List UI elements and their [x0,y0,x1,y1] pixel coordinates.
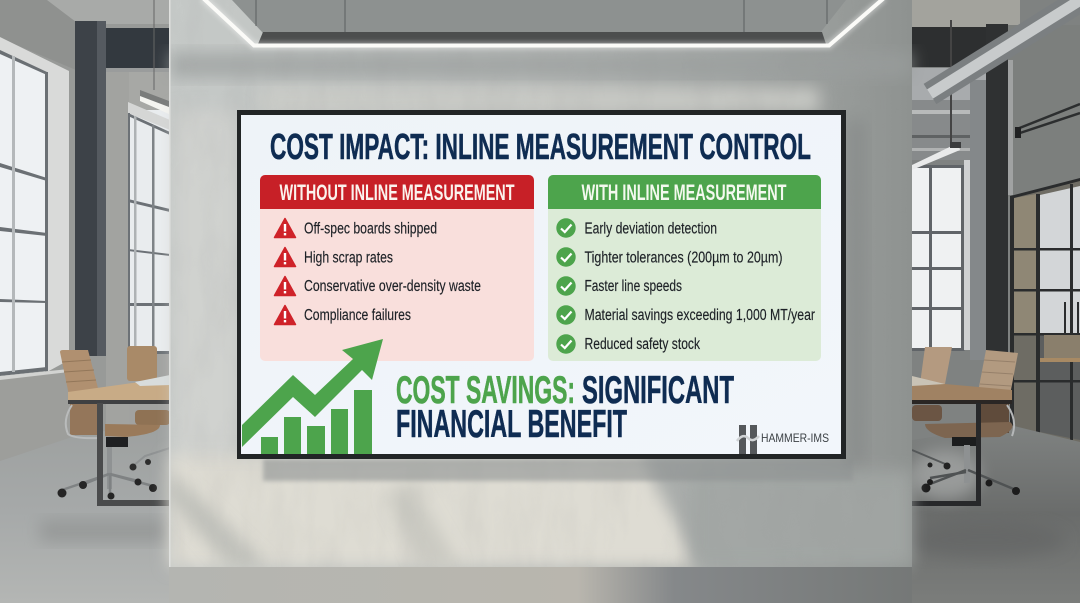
cost savings statement [396,369,734,446]
logo: Hammer-IMS: HAMMER-IMS [761,431,829,445]
item: over-density waste [274,276,481,296]
item: faster line speeds [556,276,682,296]
warning list [274,218,481,324]
item: early deviation detection: Early deviation detection [584,220,717,238]
infographic screen [237,110,846,459]
right chairs and table [912,347,1020,506]
left chairs and table [58,346,170,506]
panel: with inline measurement [548,175,821,361]
panel body [260,175,534,361]
panel heading: WITHOUT INLINE MEASUREMENT [280,180,515,205]
item: material savings [556,305,815,325]
item: reduced safety stock [556,334,700,354]
item: tighter tolerances [556,247,782,267]
cost savings statement: SIGNIFICANT [582,369,734,412]
item: off-spec boards [274,218,437,238]
cost savings statement: COST SAVINGS: [396,369,575,412]
background: right side of the office [905,0,1080,603]
background: left side of the office [0,0,170,603]
screen surface [241,115,841,454]
panel: without inline measurement [260,175,534,361]
item: faster line speeds: Faster line speeds [584,278,682,295]
concrete wall [169,0,912,567]
item: over-density waste: Conservative over-density waste [304,278,481,295]
item: off-spec boards: Off-spec boards shipped [304,220,437,238]
item: early deviation detection [556,218,717,238]
cost savings statement: FINANCIAL BENEFIT [396,403,627,446]
floor strip below the wall [169,567,912,603]
chart icon: rising bars and arrow [242,339,383,454]
screen frame [237,110,846,459]
logo: Hammer-IMS [737,425,829,454]
item: compliance failures [274,306,411,324]
benefit list [556,218,815,354]
item: tighter tolerances: Tighter tolerances (200µm to 20µm) [584,250,782,266]
item: compliance failures: Compliance failures [304,307,411,324]
ceiling recess with LED light strip [203,0,884,46]
item: reduced safety stock: Reduced safety stock [584,336,700,353]
item: high scrap rates: High scrap rates [304,250,393,266]
panel header [260,175,534,209]
item: high scrap rates [274,248,393,266]
panel header [548,175,821,209]
panel body [548,175,821,361]
item: material savings: Material savings exceeding 1,000 MT/year [584,307,815,324]
panel heading: WITH INLINE MEASUREMENT [582,180,787,205]
